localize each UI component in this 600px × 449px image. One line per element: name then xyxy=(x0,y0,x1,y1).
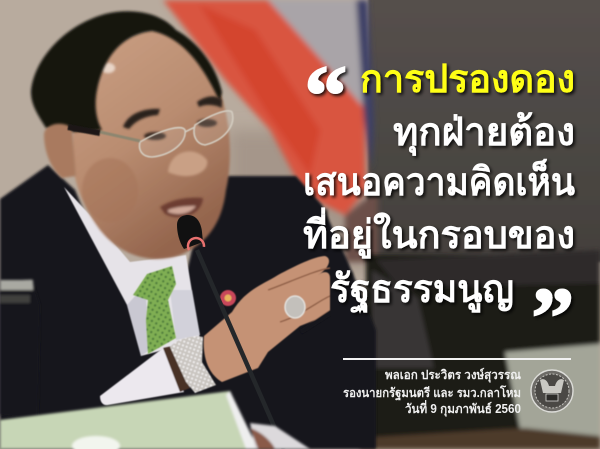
quote text xyxy=(303,49,575,365)
glasses xyxy=(68,111,233,157)
attribution text xyxy=(343,367,521,417)
monitor and desk xyxy=(360,250,600,449)
ring xyxy=(285,296,305,318)
opening quote mark: “ xyxy=(304,49,347,143)
attribution name: พลเอก ประวิตร วงษ์สุวรรณ xyxy=(385,367,521,383)
eyebrows, nose, mouth xyxy=(123,96,222,217)
person xyxy=(0,11,376,449)
ear xyxy=(44,124,76,178)
quote line 3: เสนอความคิดเห็น xyxy=(303,158,575,204)
flag xyxy=(163,0,378,262)
icon: ministry seal xyxy=(531,370,573,412)
quote line 2: ทุกฝ่ายต้อง xyxy=(393,111,575,156)
hair xyxy=(31,11,222,132)
shirt collar xyxy=(64,187,200,356)
face xyxy=(72,30,230,259)
hand xyxy=(204,256,330,382)
microphone xyxy=(177,215,284,449)
divider rule xyxy=(343,358,571,360)
tie xyxy=(133,266,176,354)
attribution role: รองนายกรัฐมนตรี และ รมว.กลาโหม xyxy=(343,385,521,401)
cuff and watch xyxy=(100,336,216,405)
quote line 5: รัฐธรรมนูญ xyxy=(330,268,514,314)
closing quote mark: ” xyxy=(532,271,574,365)
suit xyxy=(0,165,376,449)
lapel pin xyxy=(220,290,236,306)
quote line 4: ที่อยู่ในกรอบของ xyxy=(303,207,575,259)
name placard xyxy=(0,391,310,449)
attribution date: วันที่ 9 กุมภาพันธ์ 2560 xyxy=(405,400,521,417)
highlighted heading line: การปรองดอง xyxy=(360,58,575,101)
left screen xyxy=(0,279,40,420)
